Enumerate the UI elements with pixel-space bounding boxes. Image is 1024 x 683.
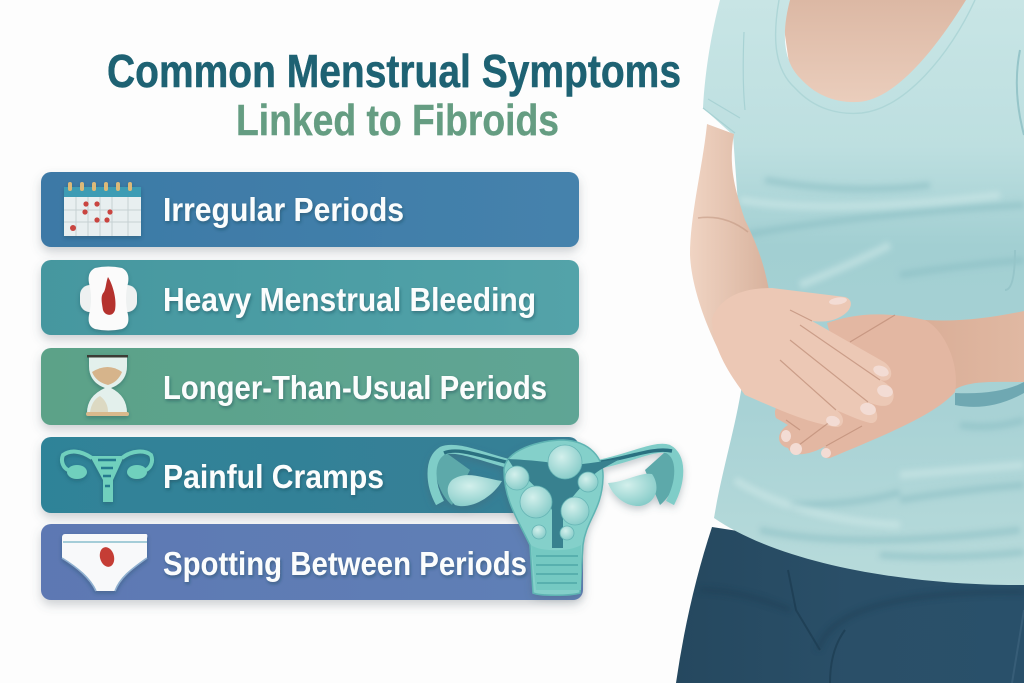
fingernails xyxy=(781,296,894,458)
cervix xyxy=(531,545,581,590)
neck and chest skin xyxy=(780,0,975,115)
left fallopian tube xyxy=(432,449,510,503)
left arm xyxy=(690,124,800,395)
panel: longer-than-usual periods xyxy=(41,348,579,425)
shirt shadow under hands xyxy=(955,382,1024,407)
uterus body xyxy=(504,440,603,595)
right fallopian tube xyxy=(600,448,679,503)
right seam xyxy=(1005,50,1024,290)
inner arm crease xyxy=(698,217,748,232)
icon: hourglass xyxy=(86,355,129,416)
panel: painful cramps xyxy=(41,437,579,513)
label: Painful Cramps xyxy=(163,458,384,495)
label: Heavy Menstrual Bleeding xyxy=(163,281,536,318)
panel: spotting between periods xyxy=(41,524,583,600)
photo: woman holding her abdomen xyxy=(676,0,1024,683)
jeans pocket and fold details xyxy=(787,570,1024,683)
right ovary xyxy=(608,474,656,506)
icon: small uterus xyxy=(62,452,152,502)
neckline hem xyxy=(776,0,975,113)
icon: sanitary pad xyxy=(80,266,137,330)
jeans xyxy=(676,527,1024,683)
label: Irregular Periods xyxy=(163,191,404,228)
t-shirt xyxy=(703,0,1024,585)
label: Spotting Between Periods xyxy=(163,545,527,582)
fibroids xyxy=(505,445,598,540)
upper left hand xyxy=(712,288,894,427)
illustration: uterus with fibroids xyxy=(432,440,680,595)
label: Longer-Than-Usual Periods xyxy=(163,369,547,406)
shirt folds and highlights xyxy=(735,180,1024,557)
title line 1: Common Menstrual Symptoms xyxy=(107,45,681,97)
left ovary xyxy=(448,475,502,506)
lower right hand xyxy=(775,314,956,458)
finger creases xyxy=(780,310,895,448)
uterine cavity xyxy=(508,459,620,548)
sleeve hem xyxy=(703,32,745,133)
icon: calendar xyxy=(64,182,141,236)
panel: heavy menstrual bleeding xyxy=(41,260,579,335)
panel: irregular periods xyxy=(41,172,579,247)
left broad ligament shading xyxy=(432,452,470,505)
title line 2: Linked to Fibroids xyxy=(236,96,559,145)
right forearm xyxy=(900,311,1024,393)
title xyxy=(107,45,681,145)
right broad ligament shading xyxy=(645,452,680,505)
icon: underwear xyxy=(62,534,147,591)
